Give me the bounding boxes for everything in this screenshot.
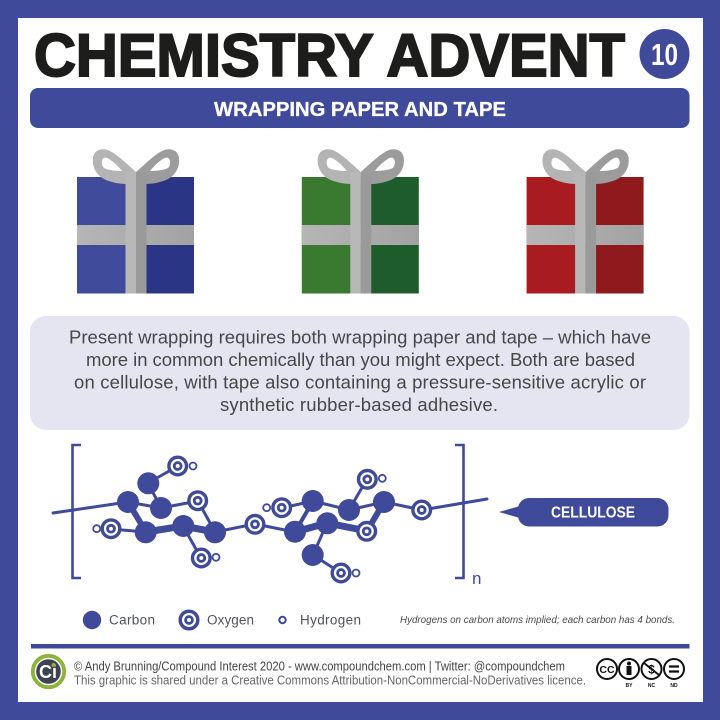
icon: green gift (302, 149, 419, 294)
repeat subscript n: n (472, 569, 481, 588)
subtitle banner: WRAPPING PAPER AND TAPE (214, 98, 506, 121)
callout: cellulose label: CELLULOSE (551, 504, 635, 522)
legend item: oxygen (180, 611, 254, 629)
icon: creative commons badges: CC (599, 664, 615, 676)
panel: description: synthetic rubber-based adhesive. (220, 394, 498, 415)
footer credits (74, 658, 586, 688)
icon: blue gift (77, 149, 194, 294)
legend item: hydrogen: Hydrogen (300, 612, 361, 628)
panel: description: more in common chemically than you might expect. Both are based (86, 349, 635, 370)
logo: Compound Interest (33, 656, 64, 687)
bracket: left (72, 445, 81, 578)
bonds (53, 466, 487, 573)
logo: Compound Interest: Ci (39, 662, 57, 682)
icon: creative commons badges: $ (648, 662, 655, 676)
footer divider (31, 644, 690, 648)
note: hydrogens implied: Hydrogens on carbon atoms implied; each carbon has 4 bonds. (400, 614, 675, 626)
legend item: oxygen: Oxygen (207, 612, 254, 628)
legend item: carbon: Carbon (109, 612, 155, 628)
icon: creative commons badges: ND (670, 683, 678, 689)
legend: atom key (83, 611, 361, 629)
panel: description: Present wrapping requires both wrapping paper and tape – which have (69, 326, 651, 348)
day number badge: 10 (651, 37, 678, 72)
hydrogen atoms (93, 462, 386, 576)
icon: creative commons badges: NC (648, 683, 655, 689)
chart: cellulose molecule (53, 445, 487, 588)
legend item: carbon (83, 611, 155, 629)
oxygen atoms (102, 457, 431, 582)
bracket: right (455, 445, 464, 578)
subtitle banner (30, 88, 690, 128)
carbon atoms (117, 472, 395, 566)
footer credits: © Andy Brunning/Compound Interest 2020 - www.compoundchem.com | Twitter: @compoundchem (74, 658, 565, 674)
panel: description (30, 316, 690, 430)
title: CHEMISTRY ADVENT (34, 22, 625, 89)
icon: red gift (527, 149, 644, 294)
icon: creative commons badges (597, 659, 684, 689)
footer credits: This graphic is shared under a Creative Commons Attribution-NonCommercial-NoDerivatives licence. (74, 672, 586, 688)
panel: description: on cellulose, with tape also containing a pressure-sensitive acrylic or (74, 372, 646, 392)
icon: creative commons badges: BY (626, 683, 633, 689)
day number badge (640, 29, 690, 79)
callout: cellulose label (499, 498, 668, 526)
